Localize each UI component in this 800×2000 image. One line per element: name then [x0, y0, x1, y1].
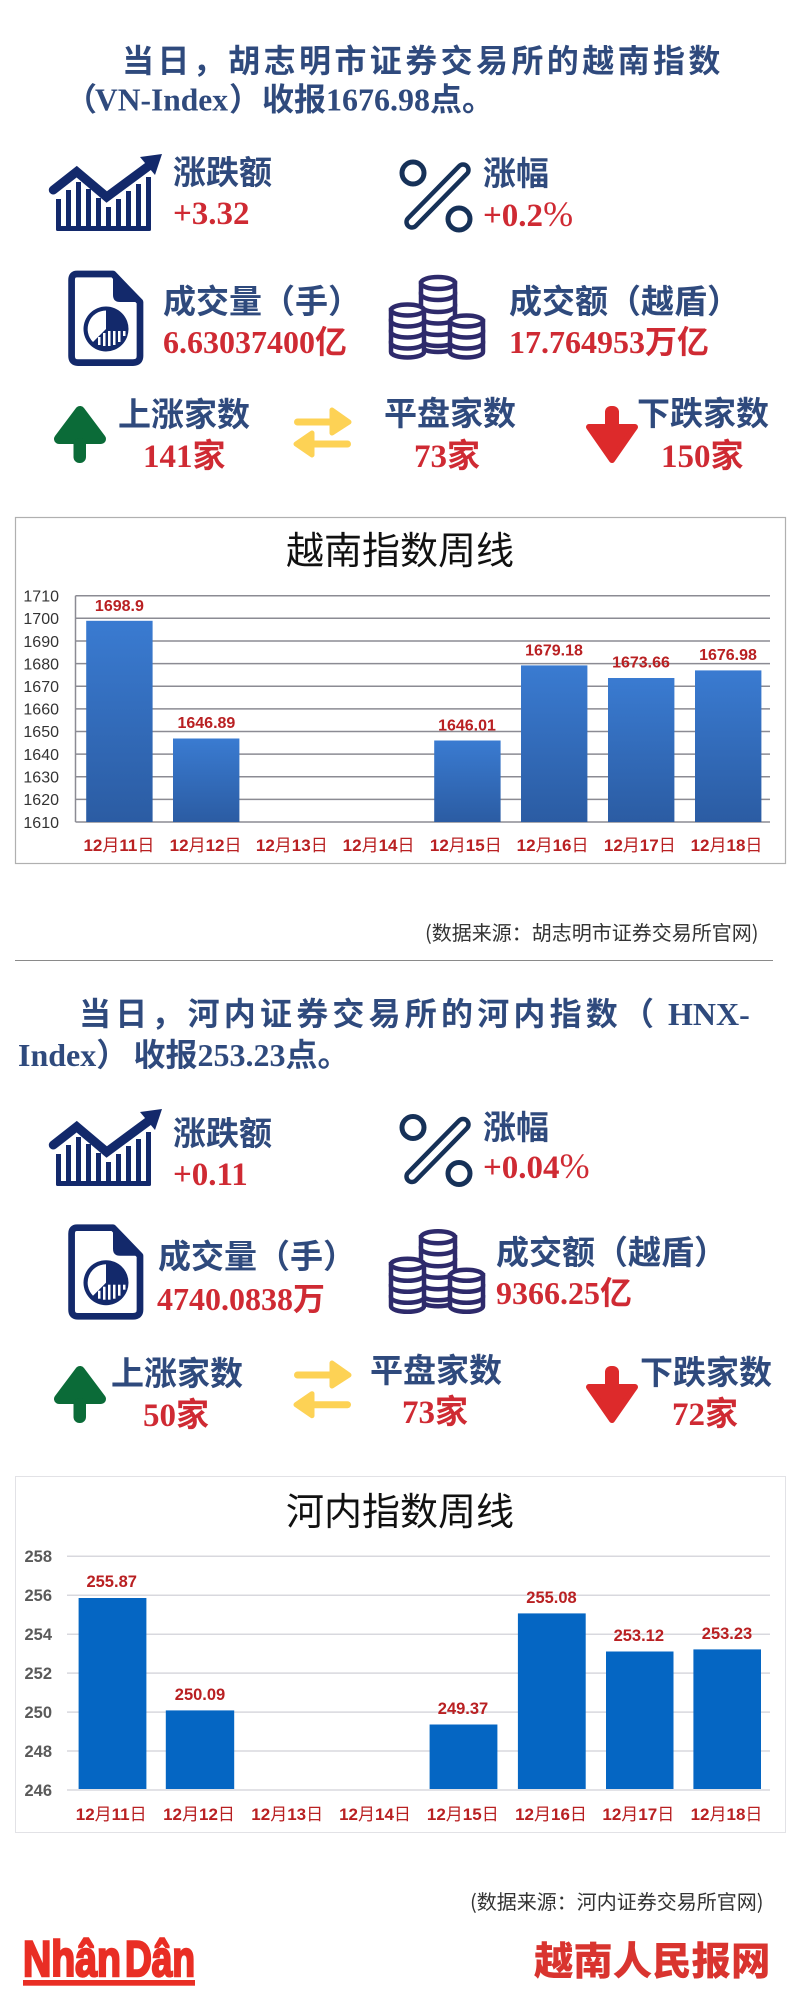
bar value labels: 255.87 [86, 1573, 137, 1591]
y axis labels: 252 [24, 1665, 52, 1683]
heading: HNX-Index: 收报253.23点。 [134, 1037, 350, 1073]
icon: coins [391, 1231, 483, 1312]
bar value labels: 250.09 [175, 1686, 225, 1704]
icon: percent [402, 1116, 470, 1184]
panel: VN-Index summary [53, 43, 769, 475]
x axis date labels: 12月17日 [602, 1805, 674, 1824]
x axis date labels: 12月17日 [604, 836, 676, 855]
y axis labels [23, 588, 59, 832]
y axis labels: 250 [24, 1704, 52, 1722]
icon: document with pie [72, 272, 142, 363]
label: change percent: 涨幅 [483, 147, 549, 195]
value: decliners: 150家 [661, 438, 744, 475]
x axis date labels: 12月15日 [427, 1805, 499, 1824]
label: decliners: 下跌家数 [640, 1346, 772, 1394]
heading: VN-Index: 收报1676.98点。 [262, 82, 494, 118]
brand name: 越南人民报网 [534, 1930, 770, 1987]
bar value labels: 1646.89 [177, 715, 235, 732]
icon: green up arrow [59, 411, 101, 463]
value: decliners: 72家 [672, 1396, 738, 1433]
bar value labels: 249.37 [438, 1700, 488, 1718]
y axis labels: 1690 [23, 634, 59, 651]
x axis date labels: 12月16日 [515, 1805, 587, 1824]
icon: red down arrow [589, 1366, 635, 1420]
heading: HNX-Index: HNX- [668, 996, 750, 1032]
value: volume: 6.63037400亿 [163, 324, 347, 360]
logo: Nhan Dan: Dân [125, 1931, 195, 1987]
value: unchanged: 73家 [414, 438, 480, 475]
y axis labels: 1630 [23, 770, 59, 786]
heading: VN-Index: （ [65, 82, 97, 118]
label: advancers: 上涨家数 [111, 1347, 243, 1395]
heading: VN-Index: VN-Index [95, 82, 228, 118]
bar value labels: 253.23 [702, 1625, 752, 1643]
value: unchanged: 73家 [402, 1394, 468, 1431]
label: change amount: 涨跌额 [173, 146, 272, 194]
metric: change percent [402, 1101, 590, 1186]
x axis date labels: 12月11日 [83, 836, 154, 855]
metric: change amount [53, 146, 272, 232]
x axis date labels: 12月11日 [76, 1805, 147, 1824]
label: change amount: 涨跌额 [173, 1107, 272, 1155]
bar value labels: 1673.66 [612, 654, 670, 672]
icon: rising chart [53, 1109, 162, 1186]
label: unchanged: 平盘家数 [370, 1344, 502, 1392]
heading: VN-Index: ） [229, 82, 261, 118]
y axis labels: 1670 [23, 679, 59, 696]
metric: advancers [59, 1347, 243, 1434]
icon: yellow exchange arrows [294, 410, 351, 455]
x axis date labels: 12月18日 [691, 1805, 762, 1824]
panel: HNX-Index weekly chart [16, 1476, 786, 1832]
x axis date labels: 12月16日 [517, 836, 589, 855]
value: turnover: 9366.25亿 [496, 1275, 632, 1311]
x axis date labels: 12月14日 [339, 1805, 411, 1824]
y axis labels: 1660 [23, 702, 59, 718]
heading: HNX-Index: Index） [18, 1037, 128, 1073]
icon: document with pie [72, 1226, 142, 1316]
heading: HNX-Index [18, 996, 750, 1073]
label: turnover: 成交额（越盾） [509, 275, 740, 323]
bar value labels: 253.12 [614, 1627, 664, 1645]
value: advancers: 50家 [143, 1397, 209, 1434]
metric: change amount [53, 1107, 272, 1193]
heading: VN-Index: 当日，胡志明市证券交易所的越南指数 [122, 43, 724, 79]
bar value labels: 1698.9 [95, 598, 144, 615]
metric: decliners [589, 1346, 772, 1433]
label: volume: 成交量（手） [163, 275, 361, 323]
bar value labels [86, 1573, 752, 1718]
bars [86, 621, 761, 822]
metric: volume [72, 272, 361, 363]
x axis date labels: 12月13日 [256, 836, 328, 855]
label: turnover: 成交额（越盾） [496, 1226, 727, 1274]
y axis labels: 1640 [23, 747, 59, 764]
panel: HNX-Index summary [18, 996, 772, 1434]
panel: VN-Index weekly chart [16, 518, 786, 864]
icon: rising chart [53, 154, 162, 231]
icon: yellow exchange arrows [294, 1363, 351, 1416]
metric: unchanged [294, 1344, 502, 1431]
metric: turnover [391, 1226, 727, 1312]
x axis date labels: 12月14日 [343, 836, 415, 855]
x axis date labels: 12月13日 [251, 1805, 323, 1824]
label: volume: 成交量（手） [158, 1230, 356, 1278]
y axis labels: 248 [24, 1743, 52, 1761]
value: change percent: +0.2% [483, 194, 573, 234]
bar value labels: 1676.98 [699, 647, 757, 664]
metric: advancers [59, 388, 250, 475]
label: unchanged: 平盘家数 [384, 387, 516, 435]
icon: green up arrow [59, 1371, 101, 1423]
y axis labels [24, 1548, 53, 1800]
logo: Nhan Dan: Nhân [23, 1931, 121, 1987]
y axis labels: 1710 [23, 588, 59, 606]
x axis date labels: 12月12日 [163, 1805, 235, 1824]
y axis labels: 258 [24, 1548, 52, 1566]
chart title: 河内指数周线 [286, 1481, 514, 1536]
label: advancers: 上涨家数 [118, 388, 250, 436]
source note: HNX-Index: (数据来源：河内证券交易所官网) [470, 1886, 764, 1915]
metric: volume [72, 1226, 356, 1317]
metric: unchanged [294, 387, 516, 475]
y axis labels: 254 [24, 1626, 53, 1644]
heading: HNX-Index: 当日，河内证券交易所的河内指数（ [79, 996, 658, 1032]
label: change percent: 涨幅 [483, 1101, 549, 1149]
value: change percent: +0.04% [483, 1146, 590, 1186]
x axis date labels: 12月15日 [430, 836, 502, 855]
y axis labels: 1680 [23, 656, 59, 674]
y axis labels: 256 [24, 1587, 52, 1605]
icon: red down arrow [589, 406, 635, 460]
value: advancers: 141家 [143, 438, 226, 475]
metric: turnover [391, 275, 740, 360]
y axis labels: 246 [24, 1782, 52, 1800]
label: decliners: 下跌家数 [637, 387, 769, 435]
x axis date labels: 12月18日 [691, 836, 762, 855]
value: change amount: +0.11 [173, 1157, 248, 1193]
bar value labels: 1679.18 [525, 642, 583, 660]
bar value labels: 255.08 [526, 1589, 577, 1607]
y axis labels: 1700 [23, 611, 59, 628]
bar value labels [95, 598, 757, 734]
source note: VN-Index: (数据来源：胡志明市证券交易所官网) [425, 917, 759, 946]
metric: decliners [589, 387, 769, 475]
y axis labels: 1620 [23, 792, 59, 809]
metric: change percent [402, 147, 573, 234]
bars [79, 1598, 761, 1789]
icon: coins [391, 277, 483, 358]
value: turnover: 17.764953万亿 [509, 324, 709, 360]
value: volume: 4740.0838万 [157, 1281, 325, 1317]
value: change amount: +3.32 [173, 196, 250, 232]
y axis labels: 1650 [23, 724, 59, 741]
icon: percent [402, 162, 470, 230]
x axis date labels [83, 836, 762, 855]
bar value labels: 1646.01 [438, 718, 496, 734]
chart title: 越南指数周线 [286, 520, 514, 575]
y axis labels: 1610 [23, 815, 59, 832]
x axis date labels [76, 1805, 762, 1824]
heading: VN-Index [65, 43, 724, 118]
x axis date labels: 12月12日 [170, 836, 242, 855]
